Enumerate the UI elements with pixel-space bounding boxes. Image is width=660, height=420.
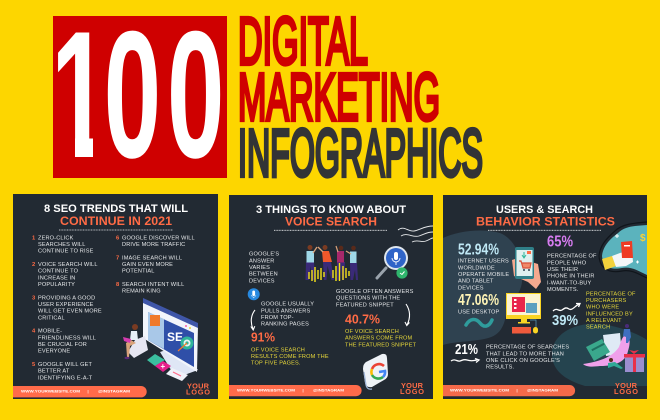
text: snippet answers: ANSWERS COME FROM (345, 336, 413, 342)
list: trends 1 to 5: MOBILE- (38, 329, 62, 335)
text: purchasers: PERCENTAGE OF (586, 291, 636, 297)
text: snippet answers: THE FEATURED SNIPPET (345, 342, 417, 348)
list: trends 1 to 5: FRIENDLINESS WILL (38, 335, 96, 341)
logo: YOUR (187, 382, 210, 391)
icon: google tile (363, 354, 388, 389)
logo (400, 381, 424, 396)
text: purchasers: A RELEVANT (586, 318, 622, 324)
text: snippet answers: OF VOICE SEARCH (345, 329, 399, 335)
text: searches: PERCENTAGE OF SEARCHES (486, 345, 569, 351)
text: purchasers: WHO WERE (586, 305, 619, 311)
list: trends 6 to 8: IMAGE SEARCH WILL (122, 255, 182, 261)
panel heading: BEHAVIOR STATISTICS (476, 215, 615, 229)
list: trends 6 to 8 (116, 235, 195, 295)
icon: magnifier with microphone (377, 246, 408, 279)
footer bar: | (88, 389, 89, 394)
logo (614, 381, 638, 396)
list: trends 6 to 8: GOOGLE DISCOVER WILL (122, 235, 195, 241)
illustration: phone with cart (512, 247, 541, 289)
list: trends 6 to 8: POTENTIAL (122, 269, 155, 275)
panel heading (44, 203, 189, 230)
text: mobile users: OPERATE MOBILE (458, 272, 509, 278)
list: trends 6 to 8: SEARCH INTENT WILL (122, 282, 184, 288)
text: searches: RESULTS. (486, 365, 515, 371)
list: trends 1 to 5: VOICE SEARCH WILL (38, 262, 98, 268)
list: trends 1 to 5: PROVIDING A GOOD (38, 295, 95, 301)
list: trends 1 to 5: WILL GET EVEN MORE (38, 309, 102, 315)
text: i-want-to-buy: USE THEIR (547, 267, 578, 273)
list: trends 1 to 5: IDENTIFYING E-A-T (38, 375, 93, 381)
text: voice search results (251, 347, 329, 367)
stat: 21 percent: 21% (455, 341, 478, 358)
stairs (128, 336, 148, 358)
panel heading: CONTINUE IN 2021 (60, 214, 172, 228)
decorative teal squiggle (466, 319, 492, 326)
text: answer varies: ANSWER (249, 258, 275, 264)
list: trends 1 to 5: CRITICAL (38, 315, 65, 321)
illustration: desktop computer (506, 293, 541, 334)
panel heading: USERS & SEARCH (496, 204, 593, 216)
list: trends 1 to 5: BETTER AT (38, 369, 70, 375)
list: trends 1 to 5: 2 (32, 262, 35, 268)
text: i-want-to-buy: PERCENTAGE OF (547, 254, 597, 260)
list: trends 1 to 5: 1 (32, 235, 36, 241)
list: trends 6 to 8: 7 (116, 255, 119, 261)
list: trends 1 to 5: INCREASE IN (38, 275, 76, 281)
illustration: people and sound waves (306, 245, 358, 282)
text: featured snippet (336, 289, 414, 308)
text: i-want-to-buy: PEOPLE WHO (547, 260, 587, 266)
footer bar: | (516, 387, 518, 392)
panel heading: VOICE SEARCH (285, 215, 377, 229)
person one (306, 245, 317, 280)
text: searches: THAT LEAD TO MORE THAN (486, 351, 564, 357)
list: trends 6 to 8: DRIVE MORE TRAFFIC (122, 242, 185, 248)
arrow: curved right (405, 304, 410, 326)
text: voice search results: OF VOICE SEARCH (251, 347, 305, 353)
text: answer varies: GOOGLE'S (249, 252, 279, 258)
list: trends 1 to 5: CONTINUE TO (38, 269, 79, 275)
text: snippet answers (345, 329, 417, 348)
footer bar: WWW.YOURWEBSITE.COM (450, 387, 509, 392)
panel heading (256, 204, 407, 230)
logo: YOUR (615, 381, 638, 390)
text: searches: ONE CLICK ON GOOGLE'S (486, 358, 560, 364)
footer bar (13, 386, 147, 397)
text: purchasers: INFLUENCED BY (586, 311, 633, 317)
illustration: shoe, card and gift (583, 324, 645, 372)
text: top-ranking pages: RANKING PAGES (261, 322, 309, 328)
text: answer varies: BETWEEN (249, 272, 278, 278)
footer bar: @INSTAGRAM (98, 389, 130, 394)
woman (132, 324, 138, 330)
text: mobile users: DEVICES (458, 285, 484, 291)
text: i-want-to-buy: PHONE IN THEIR (547, 274, 595, 280)
text: voice search results: RESULTS COME FROM THE (251, 354, 329, 360)
text: use desktop: USE DESKTOP (458, 309, 500, 315)
text: i-want-to-buy: I-WANT-TO-BUY (547, 280, 591, 286)
text: i-want-to-buy: MOMENTS. (547, 287, 579, 293)
illustration: hand holding card (602, 233, 646, 270)
decorative wave lines (398, 226, 433, 242)
panel heading: 3 THINGS TO KNOW ABOUT (256, 204, 407, 216)
sound waves (309, 263, 349, 282)
list: trends 1 to 5: ZERO-CLICK (38, 235, 74, 241)
list: trends 6 to 8: 6 (116, 235, 120, 241)
panel: user behavior statistics (443, 195, 647, 399)
stat: 52.94 percent: 52.94% (458, 241, 499, 258)
text: top-ranking pages: FROM TOP- (261, 315, 294, 321)
arrow: rising squiggle (553, 304, 580, 311)
icons below (147, 354, 165, 366)
text: top-ranking pages: PULLS ANSWERS (261, 308, 310, 314)
list: trends 1 to 5: GOOGLE WILL GET (38, 362, 93, 368)
logo: YOUR (401, 381, 424, 390)
list: trends 1 to 5: USER EXPERIENCE (38, 302, 94, 308)
background blobs (443, 222, 647, 386)
text: voice search results: TOP FIVE PAGES. (251, 361, 301, 367)
list: trends 1 to 5 (32, 235, 102, 381)
panel: seo trends (13, 194, 218, 399)
list: trends 6 to 8: REMAIN KING (122, 289, 161, 295)
person two (318, 245, 334, 280)
text: purchasers (586, 291, 636, 331)
icon: mic badge (248, 288, 260, 300)
illustration: seo monitor with woman (123, 298, 198, 381)
logo: LOGO (400, 387, 424, 396)
text: mobile users: AND TABLET (458, 279, 494, 285)
heading: marketing: MARKETING (238, 60, 440, 135)
logo: LOGO (186, 388, 210, 397)
panel heading: 8 SEO TRENDS THAT WILL (44, 203, 189, 215)
text: searches (486, 345, 569, 371)
footer bar: | (302, 387, 304, 392)
text: answer varies (249, 252, 279, 284)
arrow: curved left (251, 310, 255, 330)
footer bar: @INSTAGRAM (527, 387, 558, 392)
stat: 40.7 percent: 40.7% (345, 312, 380, 327)
list: trends 1 to 5: 4 (32, 329, 36, 335)
list: trends 1 to 5: CONTINUE TO RISE (38, 249, 94, 255)
list: trends 1 to 5: 5 (32, 362, 36, 368)
arrow: squiggle (451, 358, 479, 362)
text: mobile users (458, 259, 509, 291)
text: answer varies: VARIES (249, 265, 270, 271)
text: top-ranking pages: GOOGLE USUALLY (261, 302, 314, 308)
logo (186, 382, 210, 397)
illustration: seo monitor with woman: + (160, 362, 166, 371)
stat: 65 percent: 65% (547, 234, 573, 251)
list: trends 1 to 5: SEARCHES WILL (38, 242, 85, 248)
text: featured snippet: QUESTIONS WITH THE (336, 296, 400, 302)
list: trends 1 to 5: EVERYONE (38, 349, 70, 355)
list: trends 1 to 5: POPULARITY (38, 282, 75, 288)
list: trends 1 to 5: 3 (32, 295, 36, 301)
panel heading (476, 204, 615, 230)
text: purchasers: PURCHASERS (586, 298, 627, 304)
text: i-want-to-buy (547, 254, 597, 293)
list: trends 1 to 5: BE CRUCIAL FOR (38, 342, 87, 348)
text: mobile users: WORLDWIDE (458, 265, 495, 271)
footer bar: WWW.YOURWEBSITE.COM (21, 389, 80, 394)
footer bar: @INSTAGRAM (313, 387, 344, 392)
red box with 100: 100 (51, 0, 224, 196)
footer bar (443, 385, 575, 396)
list: trends 6 to 8: 8 (116, 282, 120, 288)
person three (336, 246, 345, 280)
title block (51, 0, 483, 196)
text: top-ranking pages (261, 302, 314, 328)
stat: 47.06 percent: 47.06% (458, 292, 499, 309)
footer bar: WWW.YOURWEBSITE.COM (237, 387, 295, 392)
text: mobile users: INTERNET USERS (458, 259, 509, 265)
text: purchasers: SEARCH (586, 325, 610, 331)
list: trends 6 to 8: GAIN EVEN MORE (122, 262, 173, 268)
logo: LOGO (614, 387, 638, 396)
illustration: seo monitor with woman: SE (167, 330, 183, 344)
text: featured snippet: GOOGLE OFTEN ANSWERS (336, 289, 414, 295)
footer bar (229, 385, 362, 396)
text: answer varies: DEVICES (249, 278, 275, 284)
heading: digital: DIGITAL (238, 4, 368, 79)
stat: 39 percent: 39% (552, 312, 578, 329)
text: featured snippet: FEATURED SNIPPET (336, 302, 394, 308)
person four (346, 246, 358, 280)
illustration: hand holding card: $ (640, 233, 646, 244)
stat: 91 percent: 91% (251, 331, 275, 345)
panel: voice search (229, 195, 433, 399)
